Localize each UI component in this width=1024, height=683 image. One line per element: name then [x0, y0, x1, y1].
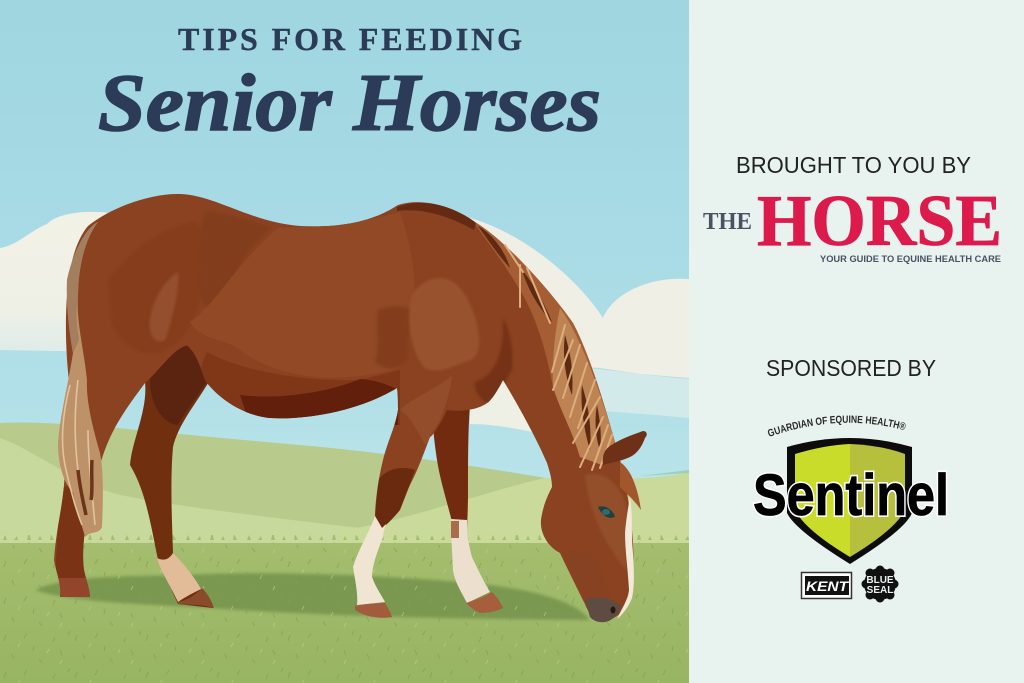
haunch highlight	[150, 272, 178, 341]
far hind sock	[157, 553, 201, 602]
eye iris	[602, 509, 610, 515]
haunch shadow	[108, 222, 206, 354]
near fore lower shadow	[375, 468, 415, 530]
logo: The Horse	[703, 180, 1002, 265]
near fore hoof	[355, 603, 392, 618]
mane	[475, 222, 615, 465]
grass edge	[0, 535, 689, 544]
chest shadow	[475, 318, 513, 403]
hill: right	[340, 472, 689, 560]
far hind hoof	[178, 588, 214, 608]
hind leg lower tint	[56, 486, 88, 596]
logo: Kent: KENT	[806, 578, 850, 594]
horse shading	[54, 203, 627, 604]
nostril	[610, 606, 616, 614]
logo wordmark weight: Sentinel	[753, 463, 949, 528]
cloud: left	[0, 212, 110, 352]
heading: sponsored by: SPONSORED BY	[766, 355, 936, 381]
horse	[54, 194, 647, 622]
shoulder highlight	[409, 278, 479, 370]
body	[54, 194, 633, 620]
loin darker	[202, 214, 267, 305]
logo arc text: GUARDIAN OF EQUINE HEALTH®	[768, 416, 906, 436]
far fore sock patch	[451, 521, 459, 538]
tail light strands	[63, 380, 95, 525]
far hind upper shadow	[150, 346, 208, 425]
title line 2: Senior Horses	[98, 57, 601, 148]
shoulder patch dark	[376, 306, 410, 368]
mane dark locks	[478, 226, 601, 450]
grass texture	[0, 545, 689, 683]
muzzle shade	[582, 598, 584, 603]
logo wordmark: Sentinel	[753, 463, 949, 528]
belly dark edge	[240, 379, 398, 425]
illustration: pasture scene	[0, 0, 689, 683]
eye	[598, 506, 615, 518]
cloud: right	[470, 218, 689, 378]
logo word: horse: HORSE	[757, 180, 1002, 261]
torso highlight	[190, 220, 364, 326]
tail dark strands	[78, 460, 92, 515]
near fore leg highlight	[400, 376, 452, 445]
ear	[603, 431, 647, 465]
blaze	[617, 497, 634, 619]
logo: Blue Seal: BLUE	[866, 575, 894, 586]
cloud: under neck	[470, 340, 560, 436]
shield	[787, 438, 912, 564]
far fore hoof	[466, 592, 503, 613]
logo: Kent	[802, 572, 852, 598]
haze band: right	[570, 366, 689, 418]
meadow	[0, 543, 689, 683]
sky	[0, 0, 689, 480]
background: right panel	[689, 0, 1024, 683]
logo: Blue Seal: SEAL	[867, 585, 893, 596]
tail top darker	[67, 222, 98, 353]
crest dark	[397, 203, 476, 230]
hill: teal sliver	[640, 470, 689, 476]
heading: brought to you by: BROUGHT TO YOU BY	[736, 152, 971, 178]
tail	[58, 222, 103, 537]
logo: Sentinel	[752, 416, 949, 602]
logo: Blue Seal	[862, 566, 898, 602]
title	[98, 21, 601, 148]
belly shadow	[199, 352, 400, 425]
logo tagline: YOUR GUIDE TO EQUINE HEALTH CARE	[820, 254, 1001, 265]
hill: middle left	[0, 438, 420, 560]
logo word: the: THE	[703, 209, 752, 235]
grass shadow	[35, 573, 590, 620]
hill: back left	[0, 423, 560, 560]
far hind leg	[130, 345, 213, 608]
face highlight	[585, 474, 627, 570]
far fore sock	[451, 519, 490, 603]
mane lower tone	[553, 308, 615, 465]
muzzle	[585, 598, 621, 622]
title line 1: TIPS FOR FEEDING	[178, 21, 522, 57]
hind hoof tint	[58, 578, 90, 597]
forelock	[620, 462, 641, 510]
mane highlights	[505, 245, 612, 470]
far fore leg	[432, 405, 470, 532]
near fore sock	[353, 516, 386, 605]
